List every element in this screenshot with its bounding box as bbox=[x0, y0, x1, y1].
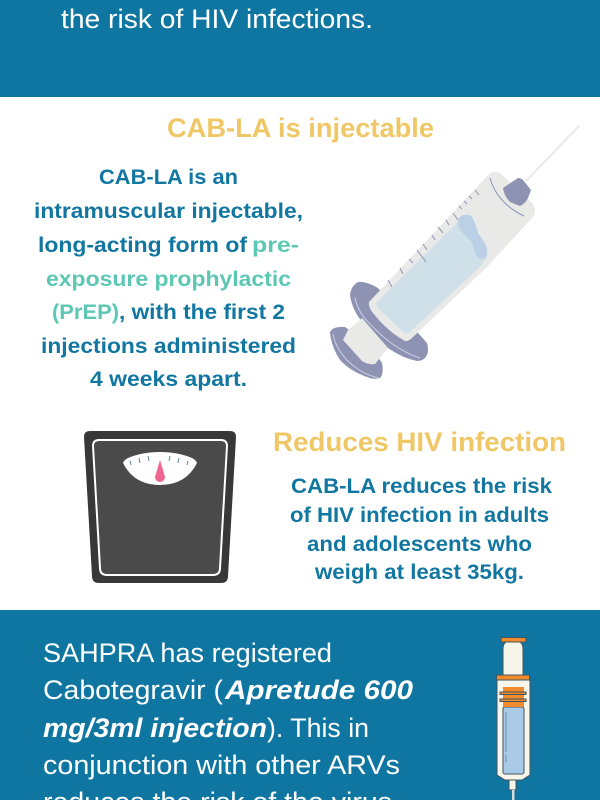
icon: bathroom weighing scale bbox=[84, 431, 236, 583]
text block: SAHPRA registration: conjunction with other ARVs bbox=[43, 750, 400, 780]
scale dial bbox=[123, 452, 197, 485]
icon: large syringe bbox=[330, 126, 579, 379]
text block: risk reduction bbox=[290, 474, 552, 584]
icon: small vial syringe bbox=[496, 638, 530, 800]
text block: SAHPRA registration: Apretude 600 bbox=[224, 675, 413, 705]
text block: CAB-LA description: long-acting form of bbox=[38, 233, 248, 257]
text block: SAHPRA registration: mg/3ml injection bbox=[43, 713, 267, 743]
text: intro closing line: the risk of HIV infections. bbox=[61, 4, 373, 34]
text block: risk reduction: weigh at least 35kg. bbox=[314, 560, 524, 584]
text block: SAHPRA registration: ). This in bbox=[267, 713, 369, 743]
heading: Reduces HIV infection: Reduces HIV infection bbox=[273, 427, 566, 457]
text block: CAB-LA description: (PrEP) bbox=[52, 300, 119, 324]
text block: risk reduction: of HIV infection in adults bbox=[290, 503, 549, 527]
text block: SAHPRA registration: Cabotegravir ( bbox=[43, 675, 223, 705]
heading: CAB-LA is injectable: CAB-LA is injectable bbox=[167, 113, 434, 143]
text block: SAHPRA registration bbox=[43, 638, 413, 800]
text block: CAB-LA description: intramuscular injectable, bbox=[34, 199, 303, 223]
panel: bottom SAHPRA band bbox=[0, 610, 600, 800]
text block: CAB-LA description: , with the first 2 bbox=[119, 300, 285, 324]
panel: top intro band bbox=[0, 0, 600, 97]
text block: CAB-LA description: CAB-LA is an bbox=[99, 165, 238, 189]
text block: CAB-LA description: exposure prophylactic bbox=[46, 267, 291, 291]
text block: risk reduction: CAB-LA reduces the risk bbox=[291, 474, 552, 498]
text block: SAHPRA registration: SAHPRA has registered bbox=[43, 638, 332, 668]
text block: CAB-LA description: injections administered bbox=[41, 334, 296, 358]
text block: CAB-LA description: pre- bbox=[252, 233, 299, 257]
text block: CAB-LA description: 4 weeks apart. bbox=[90, 367, 247, 391]
panel: white content area bbox=[0, 97, 600, 610]
text block: risk reduction: and adolescents who bbox=[307, 532, 532, 556]
text block: CAB-LA description bbox=[34, 165, 303, 391]
scale needle bbox=[155, 460, 165, 482]
